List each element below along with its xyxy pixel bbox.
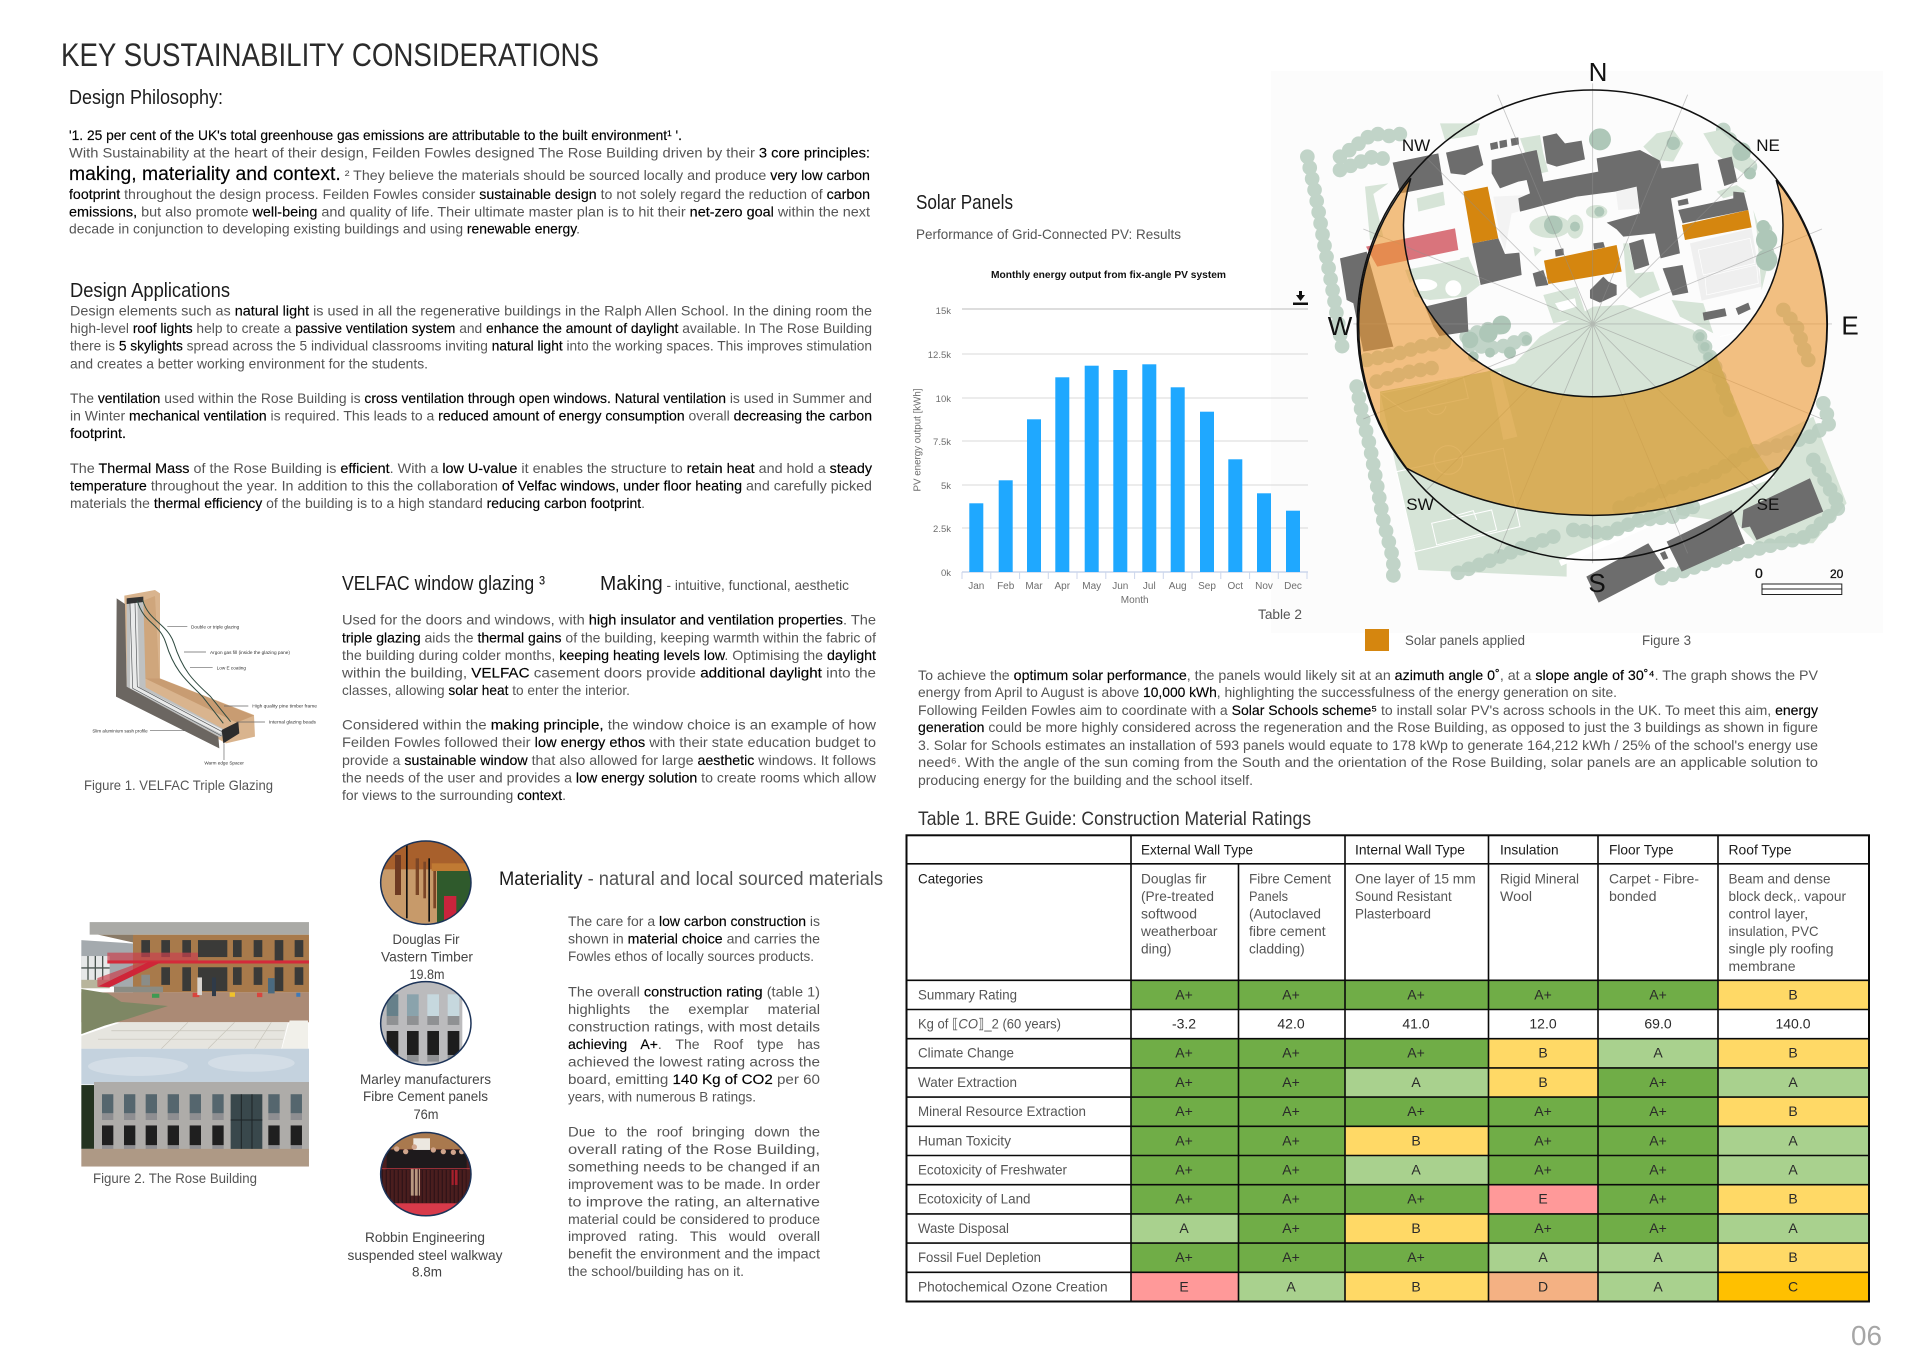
text block: ventilation: footprint. [70, 425, 126, 441]
text block: construction rating: highlights the exemplar material [568, 1001, 820, 1017]
table header [1141, 841, 1792, 857]
row: water extraction: A+ [1649, 1074, 1667, 1090]
text block: roof improvement: material could be considered to produce [568, 1211, 820, 1227]
text block: making principle: Feilden Fowles followed their low energy ethos with their state education budget to [342, 734, 876, 750]
row: ecotoxicity of freshwater: A [1411, 1161, 1421, 1177]
row: mineral resource extraction: A+ [1649, 1103, 1667, 1119]
compass labels: S [1588, 568, 1606, 598]
row: kg of CO2: Kg of ⟦CO⟧_2 (60 years) [918, 1015, 1061, 1031]
bar chart: monthly energy output: 0k [941, 568, 951, 579]
row: kg of CO2: 69.0 [1644, 1015, 1672, 1031]
icon: download [1293, 291, 1308, 305]
categories row: (Autoclaved [1249, 905, 1321, 921]
row: fossil fuel depletion: Fossil Fuel Depletion [918, 1249, 1041, 1265]
row: human toxicity: A+ [1282, 1132, 1300, 1148]
categories row: weatherboar [1140, 923, 1218, 939]
heading: making: Making - intuitive, functional, aesthetic [600, 573, 849, 595]
row: ecotoxicity of freshwater: A [1788, 1161, 1798, 1177]
row: fossil fuel depletion: A+ [1282, 1249, 1300, 1265]
panel: VELFAC window glazing [341, 573, 877, 803]
row: climate change: A+ [1407, 1045, 1425, 1061]
text block: solar performance: generation could be more highly considered across the regeneration and the Rose Building, as opposed to just the 3 buildings as shown in figure [918, 719, 1818, 735]
figure: VELFAC triple glazing window section: Double or triple glazing [191, 624, 240, 629]
row: summary rating: B [1788, 986, 1798, 1002]
row: ecotoxicity of land: A+ [1407, 1191, 1425, 1207]
text block: roof improvement: benefit the environment and the impact [568, 1246, 820, 1262]
row: waste disposal: Waste Disposal [918, 1220, 1009, 1236]
text block: solar performance: To achieve the optimum solar performance, the panels would likely sit at an azimuth angle 0˚, at a slope angle of 30˚⁴. The graph shows the PV [918, 667, 1819, 683]
text block: roof improvement: improved rating. This would overall [568, 1228, 820, 1244]
row: kg of CO2: 12.0 [1529, 1015, 1557, 1031]
row: mineral resource extraction: B [1788, 1103, 1798, 1119]
text block: low carbon construction: The care for a low carbon construction is [568, 913, 820, 929]
row: fossil fuel depletion: A+ [1175, 1249, 1193, 1265]
bar chart: monthly energy output: May [1082, 581, 1101, 592]
table header: Internal Wall Type [1355, 841, 1465, 857]
text block: natural light [70, 302, 872, 372]
row: fossil fuel depletion: A [1653, 1249, 1663, 1265]
heading: materiality: Materiality - natural and local sourced materials [499, 869, 883, 890]
row: waste disposal: A+ [1534, 1220, 1552, 1236]
bar chart: monthly energy output: Dec [1284, 581, 1302, 592]
text block: making principle: Considered within the making principle, the window choice is an example of how [342, 716, 877, 732]
categories row [918, 870, 1846, 974]
row: water extraction: A+ [1282, 1074, 1300, 1090]
table header: External Wall Type [1141, 841, 1253, 857]
text block: ventilation: in Winter mechanical ventilation is required. This leads to a reduced amount of energy consumption overall decreasing the carbon [70, 408, 872, 424]
row: ecotoxicity of land: B [1788, 1191, 1798, 1207]
row: ecotoxicity of land [918, 1185, 1869, 1214]
categories row: softwood [1141, 905, 1197, 921]
text block: ventilation: The ventilation used within the Rose Building is cross ventilation through open windows. Natural ventilation is used in Summer and [70, 390, 872, 406]
text block: philosophy paragraph: '1. 25 per cent of the UK's total greenhouse gas emissions are attributable to the built environment¹ '. [69, 127, 682, 143]
bar chart: monthly energy output: Aug [1169, 581, 1187, 592]
page number: 06 [1851, 1320, 1882, 1351]
text block: thermal mass: materials the thermal efficiency of the building is to a high standard reducing carbon footprint. [70, 495, 645, 511]
row: ecotoxicity of freshwater: A+ [1534, 1161, 1552, 1177]
bar chart: monthly energy output: 15k [936, 306, 951, 317]
campus buildings and grounds [1393, 123, 1777, 362]
text block: roof improvement: to improve the rating, an alternative [568, 1194, 820, 1210]
row: climate change: B [1788, 1045, 1798, 1061]
text block: making principle: the needs of the user and provides a low energy solution to create rooms which allow [342, 770, 877, 786]
text block: construction rating [568, 984, 820, 1104]
caption: figure 2: Figure 2. The Rose Building [93, 1170, 257, 1186]
map base [1271, 71, 1883, 633]
categories row: fibre cement [1249, 923, 1326, 939]
material: douglas fir: 19.8m [410, 966, 444, 982]
row: photochemical ozone creation: Photochemical Ozone Creation [918, 1278, 1108, 1294]
row: human toxicity: A+ [1534, 1132, 1552, 1148]
row: fossil fuel depletion: A [1538, 1249, 1548, 1265]
bar chart: monthly energy output: 7.5k [933, 437, 951, 448]
text block: solar performance: producing energy for the building and the school itself. [918, 772, 1253, 788]
row: ecotoxicity of freshwater: A+ [1175, 1161, 1193, 1177]
text block: construction rating: board, emitting 140 Kg of CO2 per 60 [568, 1071, 820, 1087]
text block: solar performance: Following Feilden Fowles aim to coordinate with a Solar Schools scheme⁵ to install solar PV's across schools in the UK. To meet this aim, energy [918, 702, 1818, 718]
text block: roof improvement: improvement was to be made. In order [568, 1176, 820, 1192]
row: mineral resource extraction: A+ [1407, 1103, 1425, 1119]
title: KEY SUSTAINABILITY CONSIDERATIONS [61, 37, 599, 73]
row: human toxicity: A [1788, 1132, 1798, 1148]
compass labels: E [1841, 310, 1859, 340]
text block: natural light: Design elements such as natural light is used in all the regenerative buildings in the Ralph Allen School. In the dining room the [70, 302, 872, 318]
row: ecotoxicity of freshwater [918, 1156, 1869, 1185]
material: fibre cement panels: Marley manufacturers [360, 1071, 491, 1087]
sun path crescent [1359, 178, 1827, 515]
bar chart: monthly energy output: Nov [1255, 581, 1273, 592]
row: human toxicity: Human Toxicity [918, 1132, 1011, 1148]
row: fossil fuel depletion [918, 1243, 1869, 1272]
material: douglas fir [381, 841, 473, 982]
caption: figure 3: Figure 3 [1642, 632, 1691, 648]
categories row: membrane [1728, 958, 1796, 974]
text block: construction rating: achieving A+. The Roof type has [568, 1036, 820, 1052]
categories row: cladding) [1249, 940, 1305, 956]
categories row: single ply roofing [1728, 940, 1834, 956]
text block: roof improvement [568, 1124, 820, 1279]
scale bar: 0 [1755, 565, 1763, 581]
row: photochemical ozone creation: B [1411, 1278, 1421, 1294]
row: kg of CO2: 41.0 [1402, 1015, 1430, 1031]
material: fibre cement panels: 76m [414, 1106, 438, 1122]
text block: natural light: high-level roof lights help to create a passive ventilation system and enhance the amount of daylight available. In The Rose Building [70, 320, 872, 336]
bar chart: monthly energy output: 12.5k [928, 350, 951, 361]
text block: glazing: the building during colder months, keeping heating levels low. Optimising the daylight [342, 647, 876, 663]
bar chart: monthly energy output: Apr [1055, 581, 1071, 592]
categories row: (Pre-treated [1141, 888, 1214, 904]
row: ecotoxicity of land: A+ [1649, 1191, 1667, 1207]
categories row: Panels [1249, 888, 1288, 904]
figure: VELFAC triple glazing window section: Warm edge Spacer [204, 760, 244, 765]
text block: roof improvement: overall rating of the Rose Building, [568, 1141, 820, 1157]
row: photochemical ozone creation: A [1286, 1278, 1296, 1294]
row: summary rating: Summary Rating [918, 986, 1017, 1002]
photo: timber facade [81, 922, 309, 1049]
categories row: block deck,. vapour [1728, 888, 1846, 904]
row: climate change: Climate Change [918, 1045, 1014, 1061]
row: ecotoxicity of freshwater: A+ [1649, 1161, 1667, 1177]
crescent tint over grass [1380, 356, 1770, 514]
categories row: bonded [1609, 888, 1656, 904]
categories row: Categories [918, 870, 983, 886]
row: climate change: B [1538, 1045, 1548, 1061]
text block: philosophy paragraph: decade in conjunction to developing existing buildings and using renewable energy. [69, 221, 580, 237]
text block: solar performance: need⁶. With the angle of the sun coming from the South and the orientation of the Rose Building, solar panels are an applicable solution to [918, 754, 1818, 770]
compass circle [1357, 90, 1827, 560]
text block: solar performance [918, 667, 1819, 788]
row: photochemical ozone creation: D [1538, 1278, 1548, 1294]
text block: low carbon construction [568, 913, 820, 964]
text block: philosophy paragraph: footprint throughout the design process. Feilden Fowles consider sustainable design to not solely regard the reduction of carbon [69, 186, 870, 202]
row: summary rating: A+ [1649, 986, 1667, 1002]
row: water extraction: B [1538, 1074, 1548, 1090]
figure: VELFAC triple glazing window section [92, 590, 317, 765]
text block: glazing: Used for the doors and windows, with high insulator and ventilation properties . The [342, 612, 876, 628]
bar chart: monthly energy output: 5k [941, 481, 951, 492]
bar chart: monthly energy output: Mar [1025, 581, 1043, 592]
table header: Floor Type [1609, 841, 1674, 857]
text block: making principle: for views to the surrounding context. [342, 787, 566, 803]
text block: natural light: there is 5 skylights spread across the 5 individual classrooms inviting natural light into the working spaces. This improves stimulation [70, 338, 872, 354]
figure: VELFAC triple glazing window section: High quality pine timber frame [252, 704, 317, 709]
table header: Roof Type [1728, 841, 1792, 857]
text block: construction rating: achieved the lowest rating across the [568, 1054, 820, 1070]
panel: materiality text [568, 913, 820, 1279]
compass labels: SW [1406, 495, 1434, 514]
material: fibre cement panels [360, 982, 491, 1122]
bar chart: monthly energy output: Feb [997, 581, 1015, 592]
row: photochemical ozone creation: E [1179, 1278, 1189, 1294]
row: waste disposal: A+ [1649, 1220, 1667, 1236]
categories row: insulation, PVC [1728, 923, 1818, 939]
heading: design philosophy: Design Philosophy: [69, 87, 223, 109]
categories row: Rigid Mineral [1500, 870, 1579, 886]
crescent outline [1359, 178, 1827, 515]
text block: low carbon construction: shown in material choice and carries the [568, 930, 820, 946]
row: kg of CO2 [918, 1015, 1811, 1032]
bar chart: monthly energy output: 10k [936, 394, 951, 405]
row: ecotoxicity of freshwater: Ecotoxicity of Freshwater [918, 1161, 1067, 1177]
row: climate change: A+ [1175, 1045, 1193, 1061]
row: human toxicity: B [1411, 1132, 1421, 1148]
compass labels [1328, 57, 1859, 598]
text block: ventilation [70, 390, 872, 441]
row: water extraction [918, 1068, 1869, 1097]
text block: philosophy paragraph: making, materiality and context. ² They believe the materials should be sourced locally and produce very low carbon [69, 164, 870, 185]
row: human toxicity: A+ [1175, 1132, 1193, 1148]
row: mineral resource extraction [918, 1097, 1869, 1126]
categories row: ding) [1141, 940, 1172, 956]
site plan drawing [1307, 83, 1847, 603]
categories row: Douglas fir [1141, 870, 1207, 886]
row: photochemical ozone creation: C [1788, 1278, 1798, 1294]
row: summary rating [918, 980, 1869, 1010]
text block: natural light: and creates a better working environment for the students. [70, 356, 428, 372]
bar chart: monthly energy output [912, 269, 1308, 606]
row: summary rating: A+ [1282, 986, 1300, 1002]
row: water extraction: A+ [1175, 1074, 1193, 1090]
material: suspended steel walkway [348, 1132, 502, 1280]
row: ecotoxicity of land: Ecotoxicity of Land [918, 1191, 1030, 1207]
panel: design applications [70, 280, 872, 511]
text block: thermal mass: temperature throughout the year. In addition to this the collaboration of Velfac windows, under floor heating and carefully picked [70, 478, 872, 494]
heading: velfac: VELFAC window glazing ³ [342, 573, 545, 595]
material: suspended steel walkway: suspended steel walkway [348, 1247, 502, 1263]
compass labels: N [1589, 57, 1607, 87]
row: ecotoxicity of land: E [1538, 1191, 1548, 1207]
row: kg of CO2: 42.0 [1277, 1015, 1305, 1031]
categories row: Beam and dense [1728, 870, 1831, 886]
heading: table 1: Table 1. BRE Guide: Construction Material Ratings [918, 809, 1311, 830]
row: waste disposal [918, 1214, 1869, 1243]
bar chart: monthly energy output: Jun [1112, 581, 1128, 592]
heading: design applications: Design Applications [70, 280, 230, 302]
text block: construction rating: years, with numerous B ratings. [568, 1088, 756, 1104]
bar chart: monthly energy output: 2.5k [933, 524, 951, 535]
legend: solar panels applied: Solar panels applied [1405, 632, 1525, 648]
panel: materials [348, 841, 502, 1280]
compass labels: W [1328, 311, 1353, 341]
text block: construction rating: The overall construction rating (table 1) [568, 984, 820, 1000]
bar chart: monthly energy output: Month [1121, 595, 1149, 606]
text block: roof improvement: Due to the roof bringing down the [568, 1124, 820, 1140]
text block: solar performance: energy from April to August is above 10,000 kWh, highlighting the successfulness of the energy generation on site. [918, 684, 1617, 700]
table header: Insulation [1500, 841, 1559, 857]
caption: table 2: Table 2 [1258, 606, 1302, 622]
row: water extraction: A [1788, 1074, 1798, 1090]
text block: construction rating: construction ratings, with most details [568, 1018, 820, 1034]
figure: VELFAC triple glazing window section: Slim aluminium sash profile [92, 728, 148, 733]
row: waste disposal: B [1411, 1220, 1421, 1236]
figure: VELFAC triple glazing window section: Argon gas fill (inside the glazing pane) [210, 650, 290, 655]
text block: solar performance: 3. Solar for Schools estimates an installation of 593 panels would equate to 178 kWp to generate 164,212 kWh / 25% of the school's energy use [918, 737, 1818, 753]
row: photochemical ozone creation: A [1653, 1278, 1663, 1294]
bar chart: monthly energy output: Jul [1143, 581, 1156, 592]
row: water extraction: A [1411, 1074, 1421, 1090]
text block: glazing: classes, allowing solar heat to enter the interior. [342, 682, 630, 698]
row: climate change [918, 1039, 1869, 1068]
text block: philosophy paragraph: emissions, but also promote well-being and quality of life. Their ultimate master plan is to hit their net-zero goal within the next [69, 204, 870, 220]
text block: making principle [342, 716, 877, 803]
figure: the rose building photos [81, 922, 309, 1167]
categories row: Plasterboard [1355, 905, 1431, 921]
row: ecotoxicity of freshwater: A+ [1282, 1161, 1300, 1177]
text block: low carbon construction: Fowles ethos of locally sources products. [568, 948, 814, 964]
text block: roof improvement: something needs to be changed if an [568, 1158, 820, 1174]
solar panels on roofs [1463, 187, 1752, 284]
row: summary rating: A+ [1407, 986, 1425, 1002]
row: ecotoxicity of land: A+ [1175, 1191, 1193, 1207]
categories row: control layer, [1728, 905, 1808, 921]
compass labels: NE [1756, 136, 1780, 155]
row: mineral resource extraction: A+ [1282, 1103, 1300, 1119]
material: douglas fir: Vastern Timber [381, 948, 473, 964]
photo: fibre cement facade [81, 1049, 309, 1167]
row: kg of CO2: 140.0 [1775, 1015, 1811, 1031]
text block: making principle: provide a sustainable window that also allowed for large aesthetic windows. It follows [342, 752, 876, 768]
material: fibre cement panels: Fibre Cement panels [363, 1088, 488, 1104]
row: climate change: A [1653, 1045, 1663, 1061]
row: summary rating: A+ [1175, 986, 1193, 1002]
legend: solar panels applied [1365, 629, 1525, 651]
categories row: Wool [1500, 888, 1532, 904]
row: waste disposal: A+ [1282, 1220, 1300, 1236]
bar chart: monthly energy output: Sep [1198, 581, 1216, 592]
row: human toxicity: A+ [1649, 1132, 1667, 1148]
row: photochemical ozone creation [918, 1272, 1869, 1302]
compass labels: NW [1402, 136, 1430, 155]
row: ecotoxicity of land: A+ [1282, 1191, 1300, 1207]
row: fossil fuel depletion: B [1788, 1249, 1798, 1265]
row: climate change: A+ [1282, 1045, 1300, 1061]
text block: philosophy paragraph [69, 127, 870, 237]
scale bar: 20 [1830, 567, 1844, 581]
text block: roof improvement: the school/building has on it. [568, 1263, 744, 1279]
bar chart: monthly energy output: PV energy output [kWh] [912, 388, 924, 492]
subheading: PV performance: Performance of Grid-Connected PV: Results [916, 226, 1181, 242]
row: mineral resource extraction: A+ [1175, 1103, 1193, 1119]
categories row: Carpet - Fibre- [1609, 870, 1699, 886]
bar chart: monthly energy output: Oct [1228, 581, 1243, 592]
text block: glazing [341, 612, 876, 698]
row: summary rating: A+ [1534, 986, 1552, 1002]
row: fossil fuel depletion: A+ [1407, 1249, 1425, 1265]
material: suspended steel walkway: 8.8m [412, 1264, 442, 1280]
row: waste disposal: A [1179, 1220, 1189, 1236]
chart title: Monthly energy output from fix-angle PV system [991, 269, 1226, 281]
text block: thermal mass: The Thermal Mass of the Rose Building is efficient. With a low U-value it enables the structure to retain heat and hold a steady [70, 460, 872, 476]
scale bar [1755, 565, 1844, 594]
figure: VELFAC triple glazing window section: Low E coating [217, 665, 246, 670]
figure: VELFAC triple glazing window section: Internal glazing beads [269, 720, 317, 725]
row: mineral resource extraction: A+ [1534, 1103, 1552, 1119]
figure 3: site plan with sun path [1271, 57, 1883, 651]
compass labels: SE [1757, 495, 1779, 514]
panel: design philosophy [69, 87, 870, 237]
material: suspended steel walkway: Robbin Engineering [365, 1229, 485, 1245]
text block: glazing: triple glazing aids the thermal gains of the building, keeping warmth within the fabric of [342, 630, 876, 646]
text block: glazing: within the building, VELFAC casement doors provide additional daylight into the [341, 664, 876, 680]
text block: philosophy paragraph: With Sustainability at the heart of their design, Feilden Fowles designed The Rose Building driven by their 3 core principles: [69, 144, 870, 160]
row: water extraction: Water Extraction [918, 1074, 1017, 1090]
row: waste disposal: A [1788, 1220, 1798, 1236]
categories row: One layer of 15 mm [1355, 870, 1476, 886]
row: human toxicity [918, 1126, 1869, 1156]
material: douglas fir: Douglas Fir [392, 931, 460, 947]
table: construction material ratings [906, 835, 1869, 1302]
row: kg of CO2: -3.2 [1172, 1015, 1196, 1031]
categories row: Sound Resistant [1355, 888, 1452, 904]
caption: figure 1: Figure 1. VELFAC Triple Glazing [84, 777, 273, 793]
bar chart: monthly energy output: Jan [968, 581, 984, 592]
heading: solar panels: Solar Panels [916, 192, 1013, 214]
row: mineral resource extraction: Mineral Resource Extraction [918, 1103, 1086, 1119]
categories row: Fibre Cement [1249, 870, 1331, 886]
text block: thermal mass [70, 460, 872, 511]
